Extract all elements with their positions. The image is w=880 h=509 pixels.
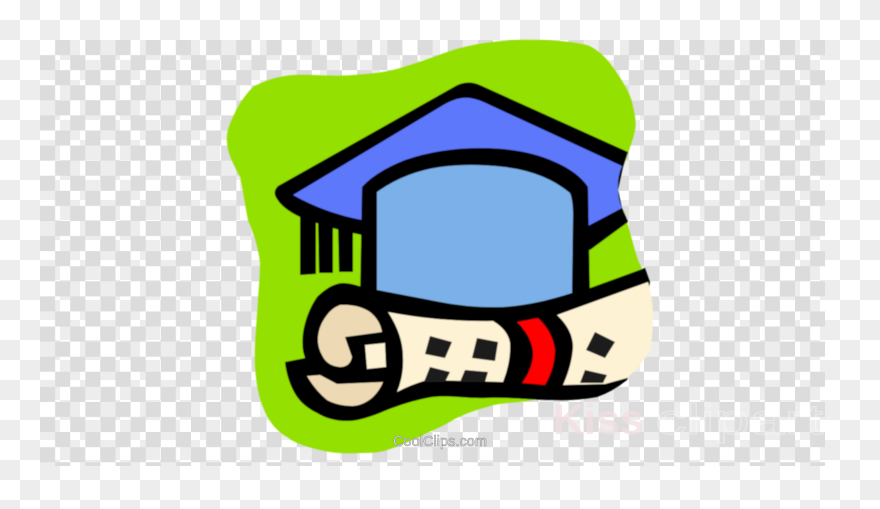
scroll right section	[557, 282, 653, 385]
cap board	[275, 82, 628, 250]
watermark: CoolClips: CoolClips.com	[393, 434, 487, 450]
watermark: kiss: Kiss	[553, 396, 644, 444]
diploma text squares	[424, 332, 615, 383]
background: inner checkerboard	[40, 40, 825, 466]
cap crown	[360, 148, 590, 307]
scroll outline	[285, 268, 650, 421]
tassel	[300, 212, 353, 275]
rolled end lower beige	[307, 375, 383, 406]
diploma scroll	[285, 268, 653, 421]
rolled end beige	[318, 305, 382, 367]
illustration: cap and diploma	[227, 40, 653, 453]
scroll middle section	[388, 312, 510, 392]
rolled end cream	[365, 343, 386, 369]
green blob backdrop	[227, 40, 645, 453]
red ribbon	[517, 318, 555, 385]
watermark: clipart: clipart	[655, 396, 823, 444]
